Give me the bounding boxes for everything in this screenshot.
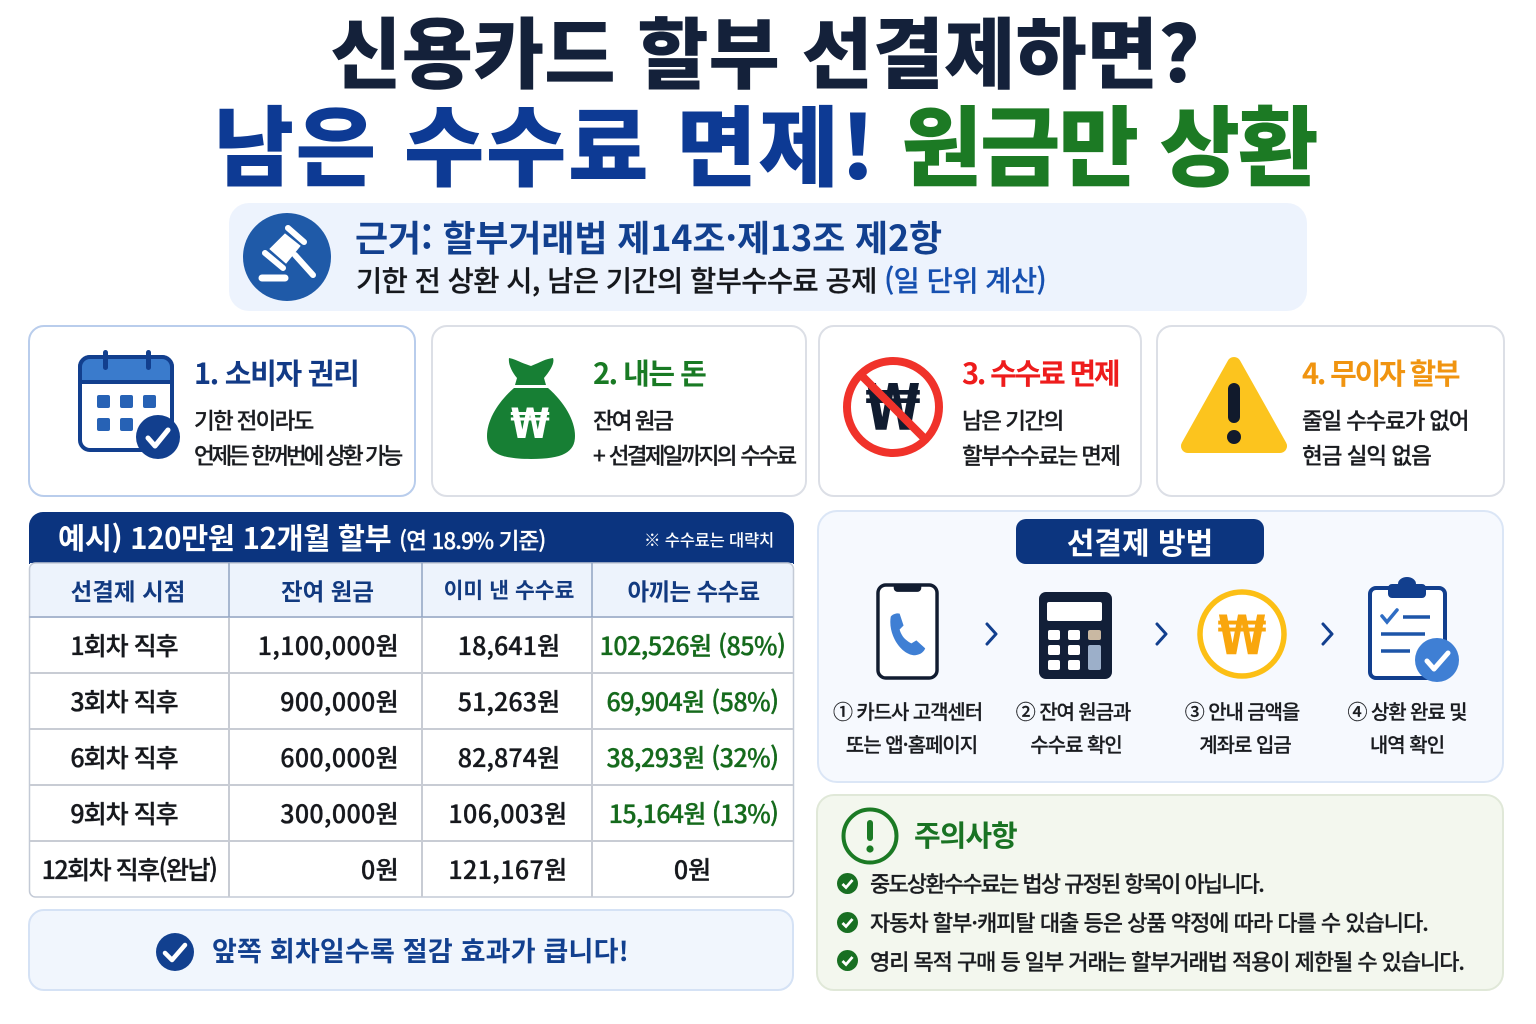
column headers: 이미 낸 수수료 (444, 574, 574, 605)
icon: clipboard (1368, 577, 1459, 682)
callout text: 앞쪽 회차일수록 절감 효과가 큽니다! (212, 930, 629, 969)
card 2 text: + 선결제일까지의 수수료 (593, 439, 794, 471)
column headers: 잔여 원금 (281, 573, 374, 607)
row: 1회차: 102,526원 (85%) (600, 627, 785, 663)
legal basis banner (229, 203, 1307, 311)
caution item 3: 영리 목적 구매 등 일부 거래는 할부거래법 적용이 제한될 수 있습니다. (870, 945, 1464, 977)
step 1 text: ① 카드사 고객센터 (833, 696, 982, 725)
panel: prepayment method (817, 510, 1504, 783)
card 3 text: 할부수수료는 면제 (962, 439, 1120, 471)
step 4 text (1348, 696, 1466, 758)
icon: exclamation (842, 808, 898, 864)
card 1: consumer right (28, 325, 416, 497)
row: 1회차: 1회차 직후 (70, 627, 178, 663)
icon: check 1 (837, 873, 858, 894)
step 3 text: 계좌로 입금 (1199, 728, 1291, 758)
row: 1회차: 1,100,000원 (258, 627, 399, 663)
table panel (28, 512, 794, 898)
row: 12회차: 121,167원 (448, 851, 568, 887)
icon: money bag (487, 358, 575, 459)
icon: gavel (243, 213, 331, 301)
row: 6회차: 38,293원 (32%) (606, 739, 778, 775)
icon: won coin: ₩ (1218, 604, 1266, 667)
row: 12회차: 12회차 직후(완납) (42, 851, 216, 887)
step 2 text: ② 잔여 원금과 (1016, 696, 1130, 725)
caution item 2: 자동차 할부·캐피탈 대출 등은 상품 약정에 따라 다를 수 있습니다. (870, 906, 1428, 938)
row: 6회차: 82,874원 (458, 739, 560, 775)
row: 9회차: 9회차 직후 (70, 795, 178, 831)
row: 9회차: 106,003원 (448, 795, 568, 831)
step 1 (833, 583, 982, 758)
step 3 text: ③ 안내 금액을 (1185, 696, 1299, 725)
card 2 heading: 2. 내는 돈 (593, 351, 705, 393)
card 4 heading: 4. 무이자 할부 (1302, 351, 1458, 393)
caution item 1: 중도상환수수료는 법상 규정된 항목이 아닙니다. (870, 867, 1263, 899)
step 3 text (1185, 696, 1300, 758)
row: 6회차 (70, 739, 778, 775)
table grid (28, 562, 794, 898)
table title: 예시) 120만원 12개월 할부 (연 18.9% 기준) (58, 516, 545, 558)
card 4 text: 현금 실익 없음 (1302, 439, 1431, 471)
icon: no won (843, 357, 943, 457)
card 4 text: 줄일 수수료가 없어 (1302, 404, 1468, 436)
card 1 heading: 1. 소비자 권리 (194, 351, 359, 393)
table title bar (29, 512, 794, 564)
step 4 (1348, 577, 1466, 758)
savings callout (28, 909, 794, 991)
card 4: interest free (1156, 325, 1505, 497)
column headers (71, 573, 760, 607)
step 4 text: 내역 확인 (1370, 728, 1444, 758)
card 3 heading: 3. 수수료 면제 (962, 351, 1118, 393)
title line 2: 남은 수수료 면제! 원금만 상환 (214, 78, 1316, 205)
row: 6회차: 6회차 직후 (70, 739, 178, 775)
approx note: ※ 수수료는 대략치 (644, 527, 774, 551)
icon: check (156, 933, 194, 971)
card 3: fee waiver (818, 325, 1142, 497)
banner heading: 근거: 할부거래법 제14조·제13조 제2항 (355, 210, 942, 262)
method heading: 선결제 방법 (1067, 519, 1213, 563)
icon: warning triangle (1181, 357, 1287, 453)
panel: cautions (816, 794, 1504, 991)
arrow 3 (1321, 622, 1334, 646)
step 1 text: 또는 앱·홈페이지 (846, 728, 977, 758)
card 3 text (962, 404, 1120, 471)
icon: check 3 (837, 950, 858, 971)
row: 3회차: 69,904원 (58%) (606, 683, 778, 719)
row: 3회차 (70, 683, 778, 719)
card 2: what you pay (431, 325, 807, 497)
method heading (1016, 519, 1264, 564)
card 2 text (593, 404, 796, 471)
card 1 text (194, 404, 402, 471)
column headers: 선결제 시점 (71, 573, 185, 607)
row: 3회차: 51,263원 (458, 683, 560, 719)
icon: money bag: ₩ (510, 400, 550, 449)
card 3 text: 남은 기간의 (962, 404, 1063, 436)
row: 9회차: 300,000원 (280, 795, 399, 831)
row: 3회차: 3회차 직후 (70, 683, 178, 719)
icon: calendar (78, 350, 180, 459)
step 1 text (833, 696, 982, 758)
row: 12회차 (42, 851, 711, 887)
card 4 text (1302, 404, 1468, 471)
step 2 text: 수수료 확인 (1030, 728, 1122, 758)
row: 1회차 (70, 627, 785, 663)
card 2 text: 잔여 원금 (593, 404, 672, 436)
icon: phone (876, 583, 939, 680)
icon: won coin (1197, 589, 1287, 679)
step 4 text: ④ 상환 완료 및 (1348, 696, 1466, 725)
icon: check 2 (837, 912, 858, 933)
card 1 text: 언제든 한꺼번에 상환 가능 (194, 439, 400, 471)
icon: calculator (1039, 592, 1112, 679)
cautions heading: 주의사항 (914, 813, 1017, 855)
column headers: 아끼는 수수료 (627, 573, 760, 607)
row: 1회차: 18,641원 (458, 627, 560, 663)
step 2 text (1016, 696, 1131, 758)
arrow 2 (1155, 622, 1168, 646)
row: 3회차: 900,000원 (280, 683, 399, 719)
row: 6회차: 600,000원 (280, 739, 399, 775)
row: 9회차: 15,164원 (13%) (609, 795, 778, 831)
step 3 (1185, 589, 1300, 758)
banner text: 기한 전 상환 시, 남은 기간의 할부수수료 공제 (일 단위 계산) (356, 259, 1046, 300)
row: 12회차: 0원 (361, 851, 399, 887)
arrow 1 (985, 622, 998, 646)
step 2 (1016, 592, 1131, 758)
icon: no won: ₩ (865, 371, 921, 446)
row: 12회차: 0원 (674, 851, 711, 887)
row: 9회차 (70, 795, 778, 831)
card 1 text: 기한 전이라도 (194, 404, 313, 436)
